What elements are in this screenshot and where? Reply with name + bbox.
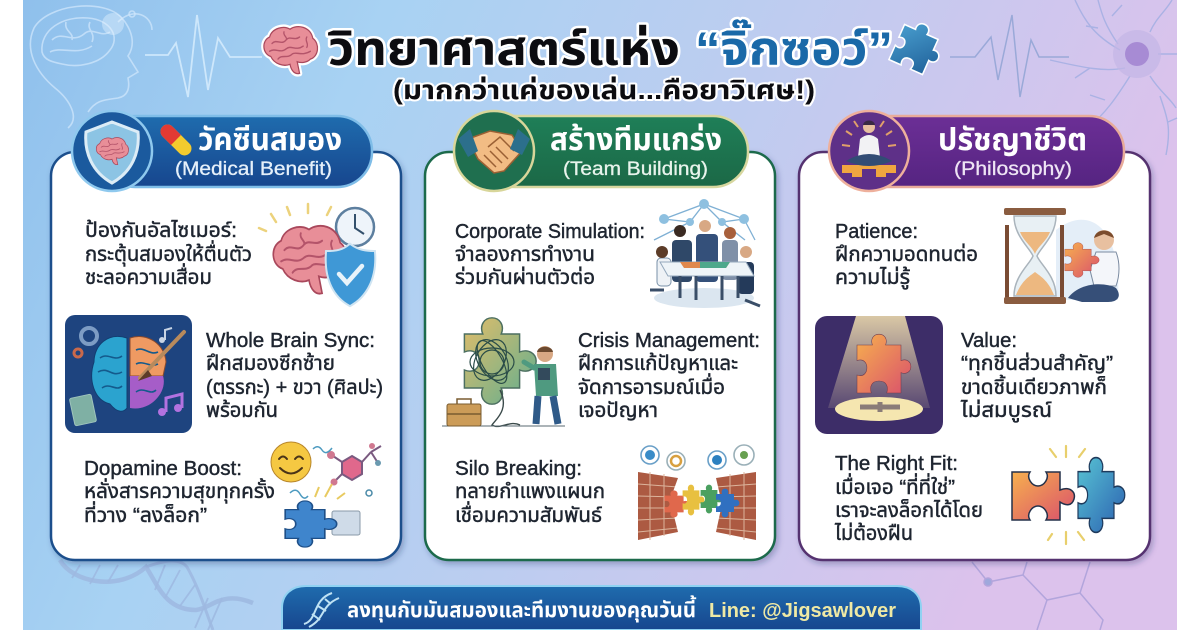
icon: two matching puzzle pieces: [1012, 446, 1125, 544]
text: patience: ความไม่รู้: [835, 265, 910, 290]
text: alzheimer: [85, 219, 252, 289]
text: value: ขาดชิ้นเดียวภาพก็: [961, 374, 1107, 399]
text: silo breaking: ทลายกำแพงแผนก: [455, 480, 605, 503]
decoration: head with brain outline: [30, 6, 152, 128]
panel: philosophy: [799, 111, 1150, 560]
icon: brain: [264, 27, 318, 74]
text: whole brain sync: [206, 329, 383, 422]
icon: meeting team: [650, 199, 760, 308]
title: main Thai text: วิทยาศาสตร์แห่ง: [327, 22, 680, 75]
text: crisis management: [578, 329, 760, 422]
text: corporate simulation: จำลองการทำงาน: [455, 243, 595, 266]
text: corporate simulation: [455, 220, 645, 289]
decoration: neuron: [1050, 0, 1177, 155]
text: corporate simulation: Corporate Simulation:: [455, 220, 645, 243]
icon: pill capsule: [158, 122, 194, 158]
decoration: right pulse line: [950, 15, 1069, 97]
text: the right fit: เมื่อเจอ “ที่ที่ใช่”: [835, 473, 955, 499]
text: dopamine boost: Dopamine Boost:: [84, 457, 242, 480]
heading: วัคซีนสมอง: [198, 122, 342, 157]
footer banner: [282, 586, 921, 630]
subheading: (Team Building): [563, 159, 708, 180]
icon: blue puzzle piece: [890, 18, 948, 77]
panel: medical benefit: [51, 111, 401, 560]
panel card: [799, 152, 1150, 560]
text: value: Value:: [961, 329, 1017, 352]
text: alzheimer: กระตุ้นสมองให้ตื่นตัว: [85, 240, 252, 267]
icon: brain clock shield: [259, 204, 374, 305]
panel card: [51, 152, 401, 560]
text: alzheimer: ป้องกันอัลไซเมอร์:: [85, 219, 237, 242]
icon: handshake badge: [454, 111, 534, 191]
text: value: ไม่สมบูรณ์: [960, 398, 1052, 423]
icon: whole brain tile: [65, 315, 192, 433]
text: whole brain sync: Whole Brain Sync:: [206, 329, 375, 352]
icon: hourglass and person: [1004, 208, 1119, 304]
banner contact: Line: @Jigsawlover: [709, 600, 896, 622]
text: crisis management: เจอปัญหา: [578, 399, 658, 422]
icon: meditation badge: [829, 111, 909, 191]
text: crisis management: Crisis Management:: [578, 329, 760, 352]
text: silo breaking: [455, 457, 605, 527]
text: silo breaking: เชื่อมความสัมพันธ์: [455, 501, 602, 527]
text: patience: ฝึกความอดทนต่อ: [835, 242, 978, 266]
icon: brick walls and puzzle bridge: [638, 445, 756, 540]
heading: ปรัชญาชีวิต: [938, 122, 1087, 157]
subheading: (Philosophy): [954, 159, 1072, 180]
text: patience: [835, 220, 978, 290]
decoration: hex network: [972, 562, 1103, 630]
icon: smile molecule puzzle: [271, 442, 381, 547]
text: silo breaking: Silo Breaking:: [455, 457, 582, 480]
text: the right fit: เราจะลงล็อกได้โดย: [835, 497, 983, 522]
subheading: (Medical Benefit): [175, 159, 332, 180]
banner text: ลงทุนกับมันสมองและทีมงานของคุณวันนี้: [347, 595, 697, 623]
text: the right fit: The Right Fit:: [835, 452, 958, 475]
panel: team building: [425, 111, 775, 560]
text: whole brain sync: (ตรรกะ) + ขวา (ศิลปะ): [206, 376, 383, 399]
text: dopamine boost: ที่วาง “ลงล็อก”: [84, 501, 207, 527]
header pill: [72, 111, 372, 191]
icon: shield brain badge: [72, 111, 152, 191]
text: the right fit: ไม่ต้องฝืน: [834, 521, 913, 545]
title: [264, 18, 948, 105]
subtitle: (มากกว่าแค่ของเล่น...คือยาวิเศษ!): [393, 75, 815, 105]
text: alzheimer: ชะลอความเสื่อม: [85, 263, 212, 289]
text: value: [960, 329, 1113, 423]
text: dopamine boost: หลั่งสารความสุขทุกครั้ง: [84, 478, 275, 504]
text: value: “ทุกชิ้นส่วนสำคัญ”: [961, 350, 1113, 376]
text: whole brain sync: พร้อมกัน: [206, 398, 278, 422]
text: whole brain sync: ฝึกสมองซีกซ้าย: [206, 351, 335, 375]
icon: DNA: [304, 593, 339, 627]
decoration: left pulse line: [145, 15, 262, 97]
decoration: DNA strand: [60, 560, 253, 630]
text: patience: Patience:: [835, 220, 918, 243]
text: crisis management: จัดการอารมณ์เมื่อ: [578, 373, 725, 399]
icon: spotlight puzzle tile: [815, 316, 943, 434]
text: the right fit: [834, 452, 983, 545]
heading: สร้างทีมแกร่ง: [550, 122, 722, 157]
title: jigsaw word: “จิ๊กซอว์”: [695, 19, 893, 75]
icon: tangled puzzle and person: [442, 318, 565, 426]
header pill: [829, 111, 1124, 191]
panel card: [425, 152, 775, 560]
text: crisis management: ฝึกการแก้ปัญหาและ: [578, 351, 738, 375]
header pill: [454, 111, 748, 191]
text: corporate simulation: ร่วมกันผ่านตัวต่อ: [455, 265, 595, 289]
text: dopamine boost: [84, 457, 275, 527]
